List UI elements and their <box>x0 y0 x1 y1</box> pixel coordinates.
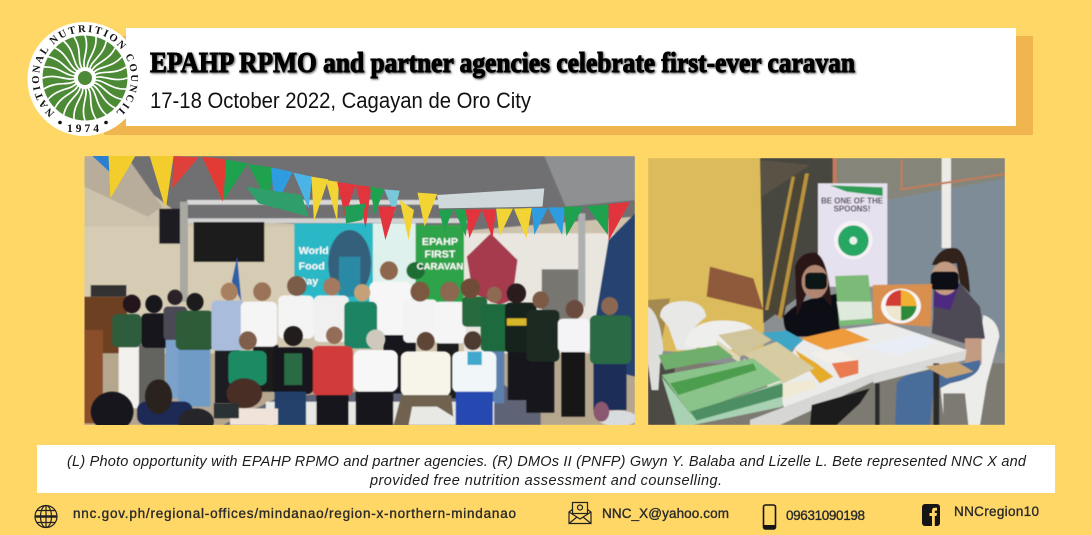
flag <box>232 257 241 302</box>
TV <box>194 222 264 262</box>
yellow brick wall <box>648 158 764 357</box>
banner panel <box>126 28 1016 126</box>
logo: National Nutrition Council seal: NATIONAL NUTRITION COUNCIL <box>32 25 138 118</box>
photo: group photo with EPAHP RPMO and partner agencies: Day <box>299 277 318 287</box>
photo: group photo with EPAHP RPMO and partner agencies <box>84 156 637 435</box>
photo: DMOs at the NNC X nutrition assessment table: SPOONS! <box>834 204 870 213</box>
ladder <box>768 175 804 318</box>
people: standing row <box>112 261 631 417</box>
subtitle: date and place: 17-18 October 2022, Cagayan de Oro City <box>150 88 531 113</box>
white chairs <box>660 301 706 350</box>
photo: group photo with EPAHP RPMO and partner agencies: EPAHP <box>422 237 458 248</box>
icon: email envelope <box>569 502 591 524</box>
red cloth <box>467 233 517 305</box>
footer contacts <box>35 502 1039 529</box>
phone number: 09631090198 <box>786 508 865 523</box>
banner <box>818 183 887 287</box>
icon: globe <box>35 506 57 528</box>
woman right <box>932 283 985 343</box>
title: EPAHP RPMO and partner agencies celebrate first-ever caravan <box>150 47 855 79</box>
people: seated row <box>228 326 496 425</box>
ground <box>648 363 1005 425</box>
title: EPAHP RPMO and partner agencies celebrate first-ever caravan <box>151 48 856 80</box>
ceiling <box>126 156 635 230</box>
caption text: provided free nutrition assessment and counselling. <box>369 473 722 489</box>
website: nnc.gov.ph/regional-offices/mindanao/region-x-northern-mindanao <box>73 506 516 521</box>
icon: mobile phone <box>764 505 776 529</box>
people: foreground audience <box>90 378 635 425</box>
table <box>773 323 967 413</box>
photo: group photo with EPAHP RPMO and partner agencies: Food <box>299 262 325 272</box>
stacks on table <box>718 328 772 357</box>
backdrop green <box>416 225 464 305</box>
banner shadow <box>104 36 1033 135</box>
photo: group photo with EPAHP RPMO and partner agencies: FIRST <box>425 250 456 260</box>
backdrop blue <box>294 222 374 302</box>
caption panel <box>37 445 1055 493</box>
Facebook handle: NNCregion10 <box>954 504 1039 519</box>
caption text: (L) Photo opportunity with EPAHP RPMO and partner agencies. (R) DMOs II (PNFP) Gwyn Y. Balaba and Lizelle L. Bete represented NNC X and <box>67 454 1027 470</box>
podium and cabinet <box>84 297 127 353</box>
header banner <box>104 28 1033 135</box>
blue tent <box>592 213 635 377</box>
logo: National Nutrition Council seal: 1974 <box>67 123 99 135</box>
email: NNC_X@yahoo.com <box>602 506 729 521</box>
posters held up <box>835 275 873 326</box>
woman left <box>783 293 840 337</box>
photo: group photo with EPAHP RPMO and partner agencies: World <box>299 246 329 257</box>
photo: DMOs at the NNC X nutrition assessment table <box>648 158 1005 425</box>
speaker <box>159 209 183 244</box>
icon: facebook <box>922 504 940 526</box>
photo: group photo with EPAHP RPMO and partner agencies: CARAVAN <box>417 262 464 271</box>
photo: DMOs at the NNC X nutrition assessment table: BE ONE OF THE <box>821 196 884 205</box>
caption text <box>67 454 1027 489</box>
dark alcove <box>760 158 837 323</box>
bunting flags <box>92 156 630 241</box>
concrete wall <box>837 158 1005 200</box>
